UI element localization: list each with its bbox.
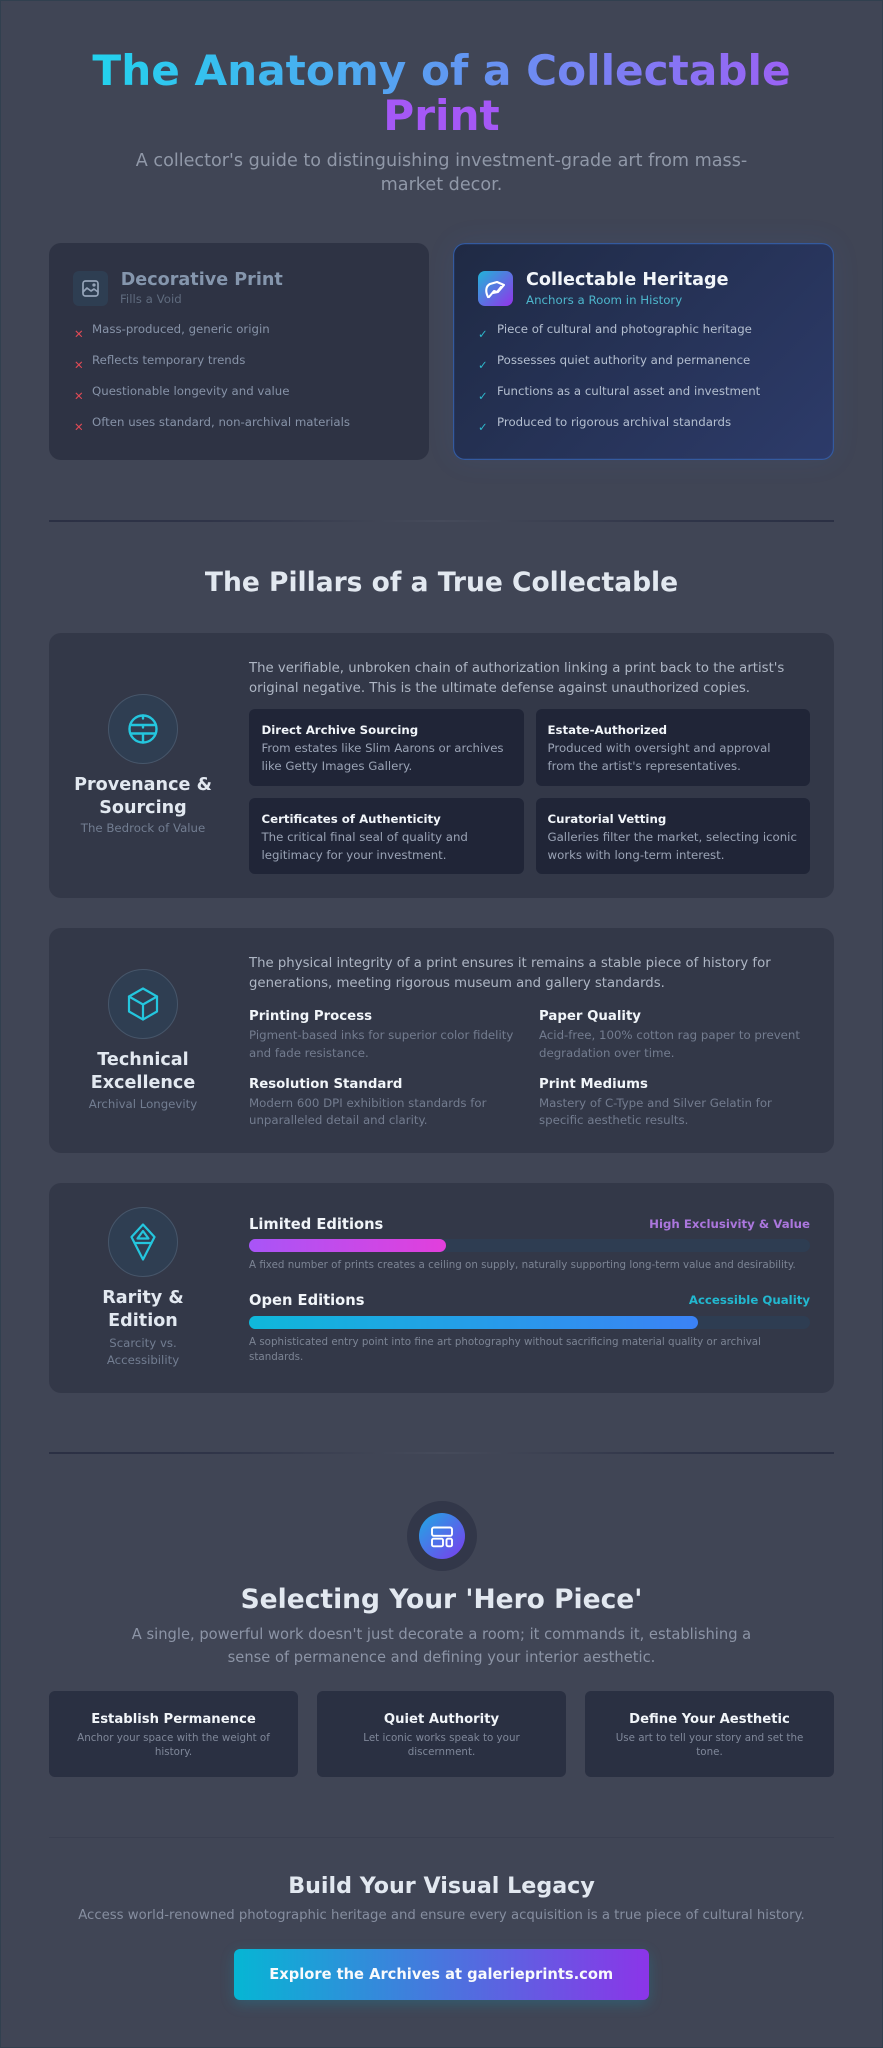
card: estate-authorized: from the artist's representatives. xyxy=(548,759,741,773)
card: define your aesthetic: Define Your Aesthetic xyxy=(629,1712,790,1727)
item: print mediums xyxy=(539,1077,772,1127)
item: printing process: Pigment-based inks for superior color fidelity xyxy=(249,1028,513,1042)
title: The Anatomy of a Collectable xyxy=(92,46,791,95)
list: collectable traits: ✓ xyxy=(478,389,488,403)
icon: heritage bird xyxy=(478,271,513,306)
subheading: archival longevity: Archival Longevity xyxy=(89,1097,197,1111)
list: decorative traits: ✕ xyxy=(74,389,84,403)
icon: framed picture xyxy=(73,271,108,306)
text: provenance description: The verifiable, unbroken chain of authorization linking a print back to the artist's xyxy=(249,660,784,676)
list: decorative traits: ✕ xyxy=(74,420,84,434)
text: limited editions note: A fixed number of prints creates a ceiling on supply, naturally supporting long-term value and desirability. xyxy=(249,1259,796,1271)
bar: limited editions 35% xyxy=(249,1239,810,1252)
heading: technical excellence: Excellence xyxy=(91,1073,195,1093)
card: define your aesthetic: tone. xyxy=(696,1746,723,1758)
label: high exclusivity: High Exclusivity & Value xyxy=(649,1217,810,1231)
text: open editions note xyxy=(249,1336,761,1363)
card: establish permanence xyxy=(49,1691,298,1777)
label: accessible quality: Accessible Quality xyxy=(689,1293,810,1307)
item: paper quality: Acid-free, 100% cotton rag paper to prevent xyxy=(539,1028,800,1042)
label: open editions: Open Editions xyxy=(249,1292,364,1308)
heading: rarity and edition: Edition xyxy=(108,1311,178,1331)
card: certificates of authenticity: The critical final seal of quality and xyxy=(262,830,468,844)
card: curatorial vetting xyxy=(536,798,810,874)
subheading: fills a void: Fills a Void xyxy=(120,292,182,306)
list: decorative traits: ✕ xyxy=(74,358,84,372)
list: collectable traits: Possesses quiet authority and permanence xyxy=(497,353,750,367)
item: resolution standard: Modern 600 DPI exhibition standards for xyxy=(249,1096,486,1110)
heading: pillars: The Pillars of a True Collectable xyxy=(205,567,678,598)
card: certificates of authenticity: legitimacy for your investment. xyxy=(262,848,447,862)
card: define your aesthetic xyxy=(585,1691,834,1777)
item: print mediums: specific aesthetic results. xyxy=(539,1113,688,1127)
card: certificates of authenticity: Certificates of Authenticity xyxy=(262,812,441,826)
icon: hero piece xyxy=(406,1501,476,1571)
text: legacy description: Access world-renowned photographic heritage and ensure every acquisition is a true piece of cultural history. xyxy=(78,1908,805,1923)
card: curatorial vetting: works with long-term interest. xyxy=(548,848,725,862)
panel: collectable heritage xyxy=(453,243,834,460)
card: quiet authority xyxy=(317,1691,566,1777)
text: technical description xyxy=(248,956,771,991)
heading: build your visual legacy: Build Your Visual Legacy xyxy=(288,1873,595,1899)
item: paper quality: degradation over time. xyxy=(539,1046,674,1060)
list: collectable traits: ✓ xyxy=(478,358,488,372)
card: curatorial vetting: Galleries filter the market, selecting iconic xyxy=(548,830,797,844)
panel: rarity and edition xyxy=(49,1183,834,1393)
list: collectable traits: Functions as a cultural asset and investment xyxy=(497,384,760,398)
card: establish permanence: history. xyxy=(155,1746,192,1758)
subheading: anchors a room: Anchors a Room in History xyxy=(526,293,682,307)
list: decorative traits: ✕ xyxy=(74,327,84,341)
subtitle xyxy=(136,150,747,194)
heading: rarity and edition: Rarity & xyxy=(102,1288,184,1308)
item: printing process: Printing Process xyxy=(249,1009,372,1024)
card: direct archive sourcing: like Getty Images Gallery. xyxy=(262,759,412,773)
item: print mediums: Print Mediums xyxy=(539,1077,648,1092)
button: explore the archives xyxy=(234,1949,649,2000)
card: estate-authorized xyxy=(536,709,810,786)
heading: provenance: Provenance & xyxy=(74,775,212,795)
list: collectable traits: Produced to rigorous archival standards xyxy=(497,415,731,429)
text: provenance description xyxy=(248,660,784,696)
icon: cube xyxy=(108,969,178,1039)
heading: hero piece: Selecting Your 'Hero Piece' xyxy=(241,1584,642,1615)
list: collectable traits: ✓ xyxy=(478,420,488,434)
card: certificates of authenticity xyxy=(249,798,524,874)
item: printing process: and fade resistance. xyxy=(249,1046,369,1060)
list: decorative traits: Reflects temporary trends xyxy=(92,353,245,367)
card: estate-authorized: Produced with oversight and approval xyxy=(548,741,771,755)
subheading: scarcity vs accessibility: Scarcity vs. xyxy=(109,1336,177,1350)
heading: technical excellence: Technical xyxy=(97,1050,189,1070)
title: Print xyxy=(383,91,500,140)
card: establish permanence: Anchor your space with the weight of xyxy=(77,1732,270,1744)
button: explore the archives: Explore the Archives at galerieprints.com xyxy=(269,1966,613,1983)
text: open editions note: standards. xyxy=(249,1351,303,1363)
item: resolution standard: Resolution Standard xyxy=(249,1077,402,1092)
subheading: scarcity vs accessibility xyxy=(107,1336,179,1367)
item: print mediums: Mastery of C-Type and Silver Gelatin for xyxy=(539,1096,772,1110)
heading: rarity and edition xyxy=(102,1288,184,1331)
card: define your aesthetic: Use art to tell your story and set the xyxy=(616,1732,803,1744)
card: curatorial vetting: Curatorial Vetting xyxy=(548,812,666,826)
list: decorative traits: Questionable longevity and value xyxy=(92,384,289,398)
list: decorative traits xyxy=(74,322,350,434)
card: direct archive sourcing xyxy=(249,709,524,786)
title xyxy=(92,46,791,140)
heading: collectable heritage: Collectable Heritage xyxy=(526,270,729,290)
card: establish permanence: Establish Permanence xyxy=(91,1712,256,1727)
text: hero description: sense of permanence and defining your interior aesthetic. xyxy=(228,1649,655,1666)
card: quiet authority: discernment. xyxy=(408,1746,475,1758)
heading: decorative print: Decorative Print xyxy=(121,270,283,290)
text: technical description: The physical integrity of a print ensures it remains a stable piece of history for xyxy=(249,956,771,971)
card: direct archive sourcing: From estates like Slim Aarons or archives xyxy=(262,741,504,755)
text: hero description: A single, powerful work doesn't just decorate a room; it commands it, establishing a xyxy=(132,1626,751,1643)
heading: provenance xyxy=(74,775,212,818)
heading: provenance: Sourcing xyxy=(99,798,187,818)
card: quiet authority: Let iconic works speak to your xyxy=(363,1732,520,1744)
item: paper quality xyxy=(539,1009,800,1060)
subtitle: A collector's guide to distinguishing investment-grade art from mass- xyxy=(136,150,747,170)
panel: technical excellence xyxy=(49,928,834,1153)
list: collectable traits: ✓ xyxy=(478,327,488,341)
text: provenance description: original negative. This is the ultimate defense against unauthorized copies. xyxy=(249,681,750,696)
list: decorative traits: Often uses standard, non-archival materials xyxy=(92,415,350,429)
heading: technical excellence xyxy=(91,1050,195,1093)
panel: provenance and sourcing xyxy=(49,633,834,898)
card: quiet authority: Quiet Authority xyxy=(384,1712,499,1727)
list: decorative traits: Mass-produced, generic origin xyxy=(92,322,270,336)
item: paper quality: Paper Quality xyxy=(539,1009,641,1024)
subheading: bedrock: The Bedrock of Value xyxy=(81,821,205,835)
item: resolution standard xyxy=(249,1077,486,1127)
icon: diamond xyxy=(108,1207,178,1277)
bar: open editions 80% xyxy=(249,1316,810,1329)
subheading: scarcity vs accessibility: Accessibility xyxy=(107,1353,179,1367)
item: resolution standard: unparalleled detail and clarity. xyxy=(249,1113,428,1127)
text: technical description: generations, meeting rigorous museum and gallery standards. xyxy=(249,976,665,991)
label: limited editions: Limited Editions xyxy=(249,1216,383,1232)
card: direct archive sourcing: Direct Archive Sourcing xyxy=(262,723,418,737)
icon: archive globe xyxy=(108,694,178,764)
text: open editions note: A sophisticated entry point into fine art photography without sacrificing material quality or archival xyxy=(249,1336,761,1348)
item: printing process xyxy=(249,1009,513,1060)
list: collectable traits: Piece of cultural and photographic heritage xyxy=(497,322,752,336)
list: collectable traits xyxy=(478,322,760,434)
text: hero description xyxy=(132,1626,751,1666)
card: estate-authorized: Estate-Authorized xyxy=(548,723,667,737)
subtitle: market decor. xyxy=(381,174,502,194)
panel: decorative print xyxy=(49,243,429,460)
